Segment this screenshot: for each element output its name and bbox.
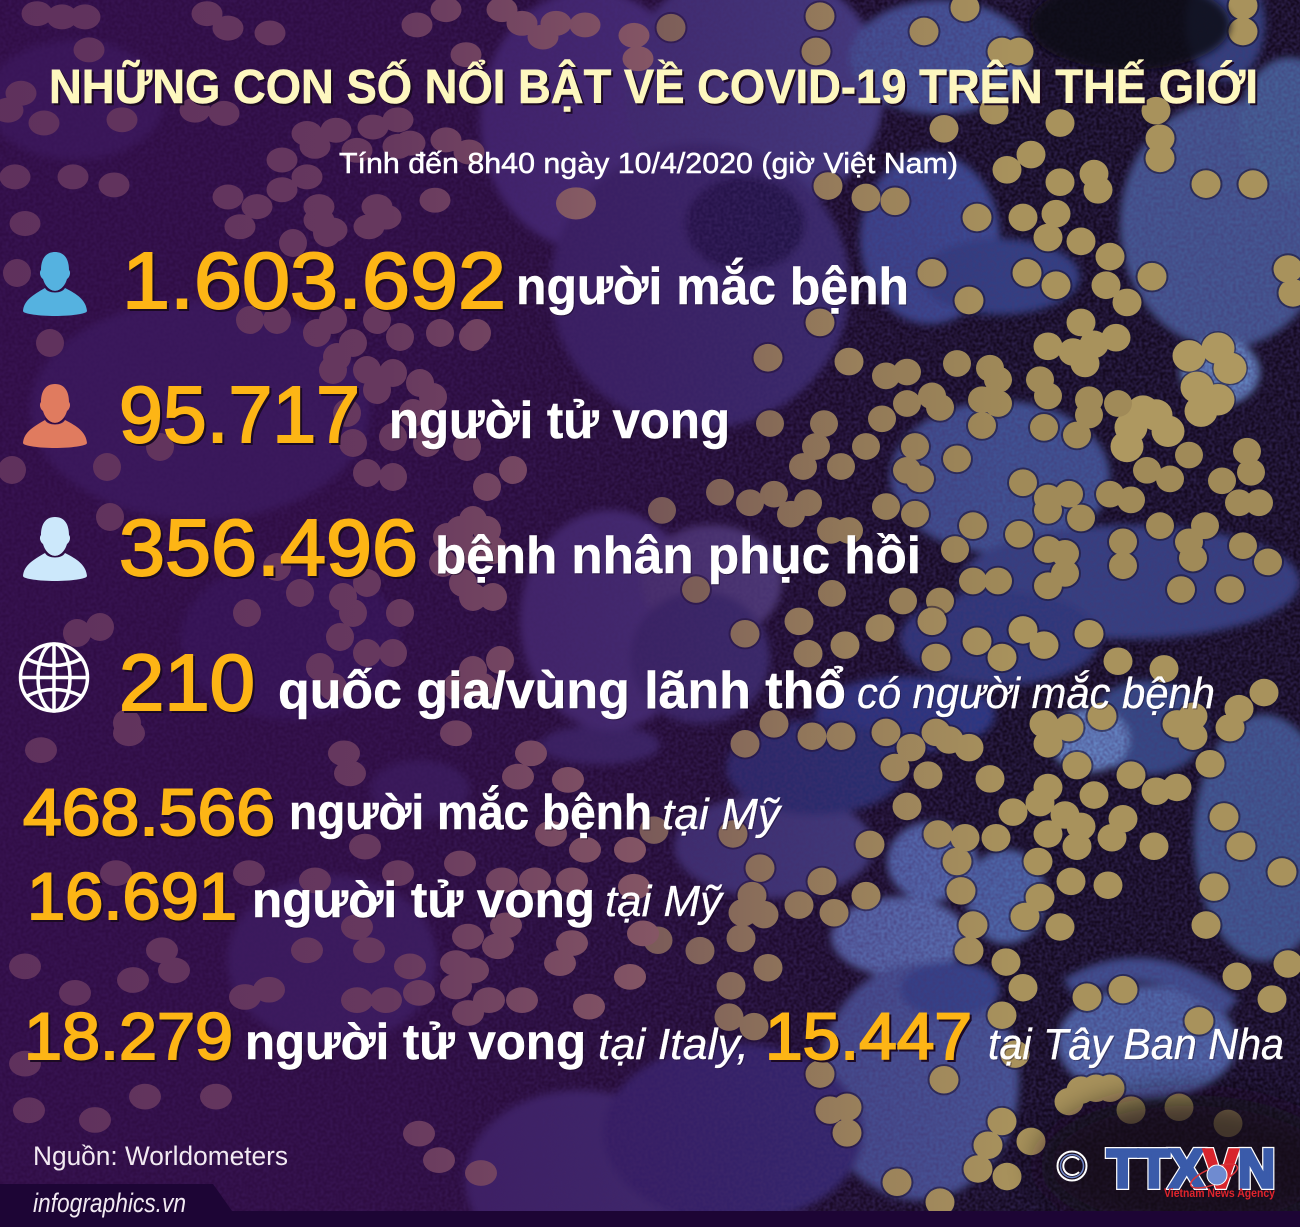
stat: Italy and Spain deaths: người tử vong (245, 1014, 586, 1070)
stat: countries: 210 (119, 638, 255, 727)
title: NHỮNG CON SỐ NỔI BẬT VỀ COVID-19 TRÊN THẾ GIỚI (49, 59, 1258, 114)
stat: recovered (119, 503, 921, 592)
source: Nguồn: Worldometers (33, 1141, 288, 1171)
dots top-right (662, 6, 1293, 601)
stat: recovered: bệnh nhân phục hồi (435, 527, 921, 585)
logo: TTXVN: TTXVN (1107, 1139, 1275, 1199)
stat: deaths: người tử vong (389, 392, 730, 450)
icon: person blue (23, 252, 87, 316)
website: infographics.vn (33, 1188, 186, 1218)
stat: US cases: tại Mỹ (662, 790, 783, 839)
stat: Italy and Spain deaths: tại Tây Ban Nha (988, 1020, 1284, 1069)
stat: Italy and Spain deaths: 18.279 (24, 999, 233, 1073)
stat: cases: người mắc bệnh (516, 257, 909, 316)
dots bottom-right (654, 621, 1288, 1202)
icon: person orange (23, 384, 87, 448)
stat: US cases: 468.566 (23, 775, 275, 849)
stat: countries (119, 638, 1215, 727)
stat: cases: 1.603.692 (122, 236, 506, 325)
ghost spheres left (0, 40, 165, 160)
stat: US deaths: 16.691 (27, 859, 237, 933)
icon: copyright (1058, 1152, 1086, 1180)
icon: globe (20, 644, 88, 711)
stat: cases (122, 236, 909, 325)
bottom band (0, 1184, 1300, 1227)
stat: deaths: 95.717 (119, 370, 360, 459)
stat: recovered: 356.496 (119, 503, 418, 592)
stat: US deaths: người tử vong (252, 872, 595, 928)
stat: US cases (23, 775, 783, 849)
stat: countries: quốc gia/vùng lãnh thổ (278, 662, 846, 720)
stat: Italy and Spain deaths (24, 999, 1284, 1073)
logo: TTXVN: TTXVN (1107, 1139, 1275, 1199)
stat: Italy and Spain deaths: tại Italy, (598, 1020, 749, 1069)
icon: person light blue (23, 517, 87, 581)
stat: US cases: người mắc bệnh (289, 785, 652, 840)
stat: deaths (119, 370, 730, 459)
stat: Italy and Spain deaths: 15.447 (765, 999, 972, 1073)
subtitle: Tính đến 8h40 ngày 10/4/2020 (giờ Việt Nam) (339, 148, 958, 180)
stat: US deaths: tại Mỹ (605, 877, 725, 926)
logo: TTXVN: Vietnam News Agency (1164, 1188, 1276, 1200)
dots left (12, 233, 513, 723)
stat: US deaths (27, 859, 725, 933)
stat: countries: có người mắc bệnh (857, 669, 1215, 718)
